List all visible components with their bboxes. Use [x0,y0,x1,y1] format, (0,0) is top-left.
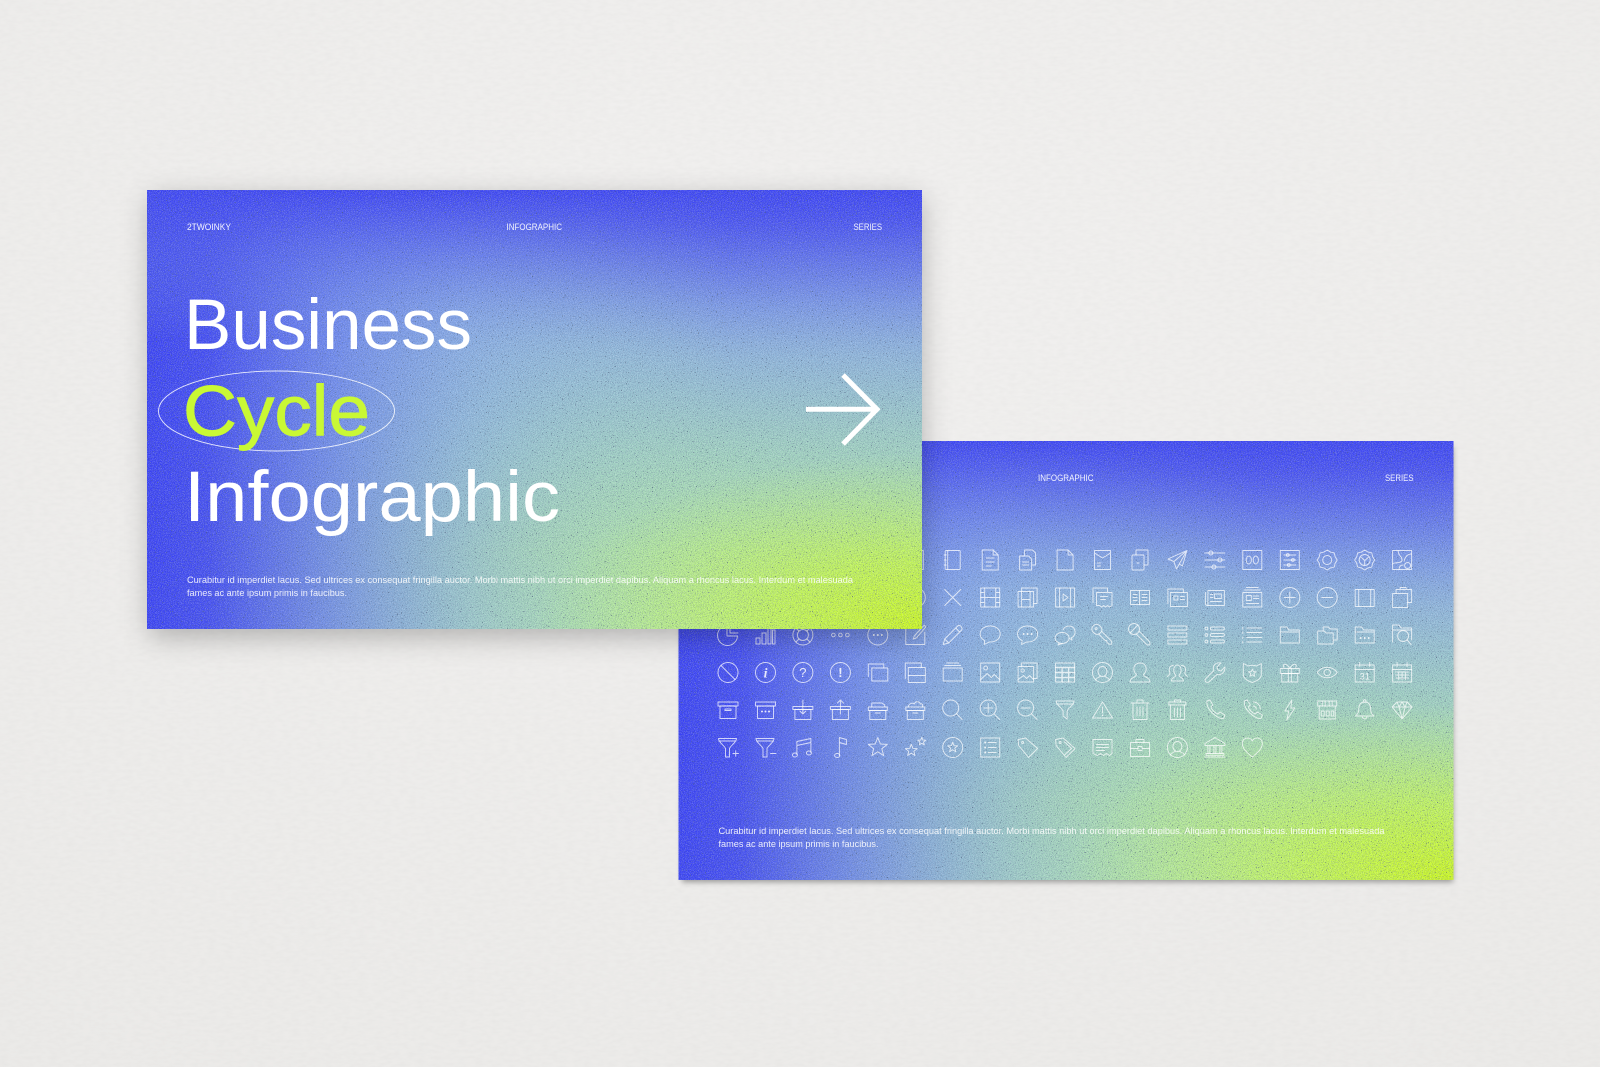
icon: bell [1356,700,1374,719]
icon: folder dots [1355,627,1374,643]
icon: calendar date: 31 [1360,672,1370,682]
icon: settings panel [1280,550,1299,570]
highlight ellipse [158,371,394,451]
icon: archive box [718,702,738,718]
body text [187,575,854,599]
icon: envelope sheet [1094,550,1110,570]
icon: speech bubble dots [1018,626,1038,644]
icon: folder search [1393,625,1412,644]
icon: pencil [943,626,962,644]
icon: tablets [1132,550,1148,570]
icon: lifebuoy [793,625,813,645]
icon: circle partly hidden [905,588,925,608]
title: Business: Business [184,286,472,365]
icon: bolt [1285,700,1295,720]
icon: exclamation [830,662,850,682]
icon: trash lidded [1169,700,1186,720]
icon: box dots [756,702,776,718]
icon: store [1318,701,1337,719]
icon: receipts [1093,588,1112,607]
icon: layers [868,664,888,681]
icon: paper plane [1168,550,1187,569]
body text: Curabitur id imperdiet lacus. Sed ultrices ex consequat fringilla auctor. Morbi mattis nibh ut orci imperdiet dapibus. Aliquam a rhoncus lacus. Interdum et malesuada [187,575,854,586]
icon: phone [1207,700,1225,719]
icon: calendar date [1355,662,1374,682]
icon: calculator grid [1056,663,1075,682]
icon: two bubbles [1055,626,1075,645]
icon: speech bubble [980,626,1000,644]
icon: folders [1318,627,1337,644]
icon: twin dials [1243,550,1262,570]
icon: stars [905,737,926,756]
icon: warning [1092,702,1112,718]
icon: checklist [981,738,1000,757]
panel: icon slide (back card) [678,441,1454,882]
icon: images [1018,663,1037,682]
icon: rows [1168,626,1187,644]
icon: ellipsis [832,633,849,637]
icon: question: ? [799,665,807,680]
icon: bags [1393,588,1412,608]
icon: bar chart [756,626,775,644]
back card header label: SERIES: SERIES [1385,473,1414,483]
title: Infographic: Infographic [184,458,560,537]
icon: edit [906,625,926,644]
icon: tray [943,663,962,681]
icon: circle minus [1317,588,1337,608]
icon: wrench [1205,663,1225,682]
icon: blank file [1057,550,1073,570]
icon: stacked tray [905,663,925,682]
icon: info: i [764,666,768,682]
icon: list [1243,628,1262,643]
header label: INFOGRAPHIC: INFOGRAPHIC [506,222,562,232]
back card body text [718,826,1385,850]
icon: gear with hub [1355,550,1375,570]
icon: film strip [981,588,1000,607]
icon: box with stuff [906,702,925,720]
icon: receipt [1093,740,1112,756]
icon: zoom out [1018,700,1037,720]
icon: heart [1242,738,1262,757]
icon: eye [1317,667,1337,678]
header label: 2TWOINKY: 2TWOINKY [187,222,231,232]
icon: document text [982,550,998,570]
title: Cycle: Cycle [183,372,370,452]
icon: circle star [943,738,963,758]
icon: briefcase [1130,740,1150,756]
icon: phone call [1244,700,1262,719]
icon: box in [793,700,813,720]
icon: video [1056,588,1075,607]
icon: frame [1355,590,1374,606]
icon: close cross [945,590,961,606]
icon: clipped sheet [906,550,923,570]
icon: map [1393,550,1412,570]
icon: circle plus [1280,588,1300,608]
icon: funnel minus [756,738,776,757]
panel: title slide (front card) [147,190,922,637]
icon: newspaper [1130,590,1150,604]
icon: sliders [1205,551,1225,569]
icon: news stack [1205,590,1224,606]
icon: bullet rows [1205,627,1224,643]
icon: key [1090,623,1115,647]
icon: circle ellipsis [868,625,888,645]
icon: search [943,700,962,720]
back card body text: fames ac ante ipsum primis in faucibus. [718,839,878,850]
icon: box with papers [868,703,887,720]
icon: music note [835,738,846,758]
icon: exclamation: ! [838,665,843,680]
icon: prohibited [718,662,738,682]
icon: funnel plus [718,738,738,757]
icon: user circle outline [1167,738,1187,758]
arrow [806,375,877,444]
icon: gear [1317,550,1337,570]
icon: pie chart [718,625,738,645]
icon: users [1167,665,1187,681]
icon: notebook [944,550,960,570]
icon: documents [1020,550,1036,570]
icon: star [868,738,887,756]
icon: question [793,662,813,682]
icon: user circle [1092,662,1112,682]
icon: stacked cards [1168,589,1187,606]
icon: funnel [1056,701,1074,719]
back card body text: Curabitur id imperdiet lacus. Sed ultrices ex consequat fringilla auctor. Morbi mattis nibh ut orci imperdiet dapibus. Aliquam a rhoncus lacus. Interdum et malesuada [718,826,1385,837]
icon grid [718,550,1412,758]
icon: folder [1280,627,1299,643]
icon: info [756,662,776,682]
icon: box out [830,700,850,720]
icon: tag [1018,738,1038,758]
icon: image [981,663,1000,682]
icon: diamond [1392,702,1412,719]
icon: trash [1131,700,1149,720]
icon: badge star [1243,664,1261,682]
icon: calendar grid [1393,662,1412,682]
icon: news pile [1243,588,1262,607]
icon: bank [1205,738,1225,757]
body text: fames ac ante ipsum primis in faucibus. [187,588,347,599]
icon: film strips [1018,588,1037,607]
icon: zoom in [980,700,1000,720]
icon: tags [1056,738,1075,758]
icon: music notes [792,738,811,757]
header label: SERIES: SERIES [854,222,882,232]
icon: gift [1280,664,1299,682]
icon: user bust [1130,663,1150,682]
back card header label: INFOGRAPHIC: INFOGRAPHIC [1038,473,1094,483]
icon: microphone [1126,621,1154,649]
